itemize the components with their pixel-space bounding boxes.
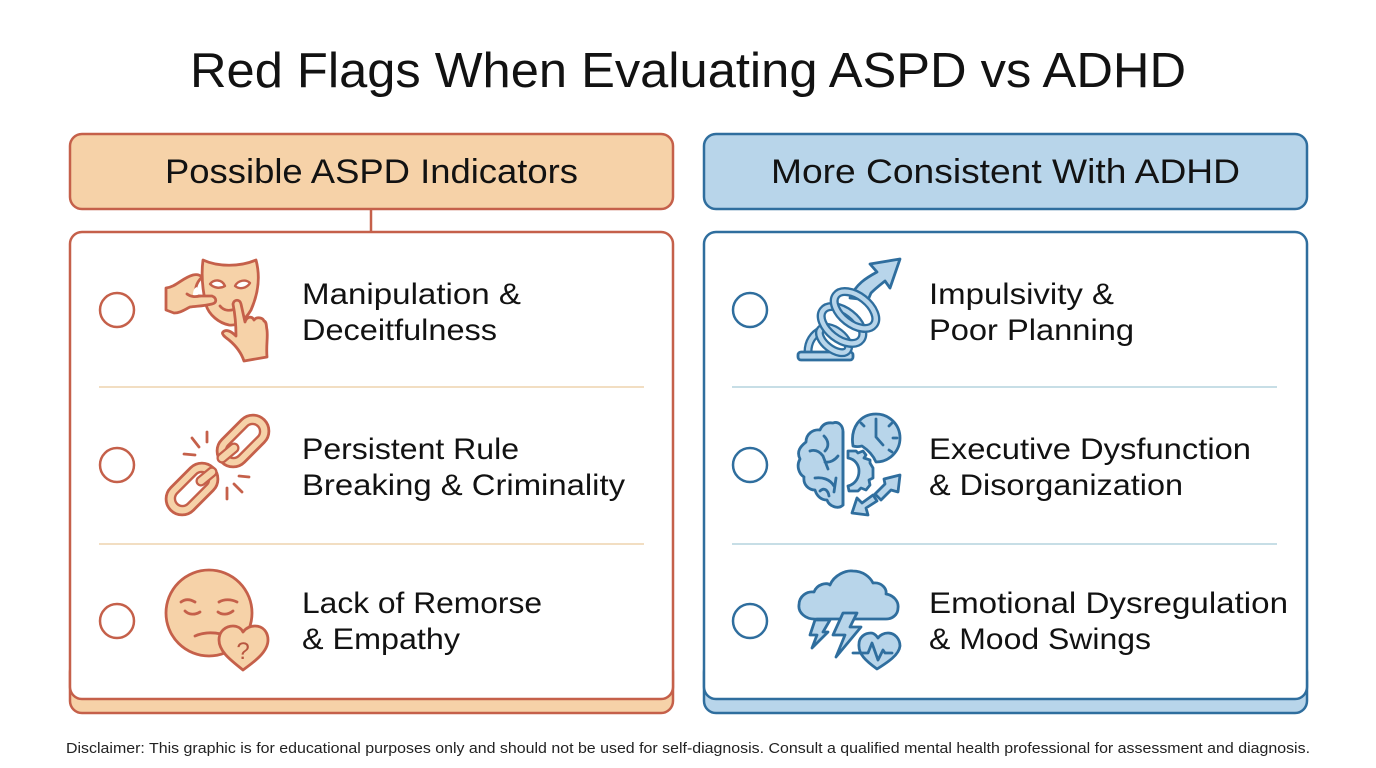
panel header: ASPD <box>70 134 673 209</box>
label: Manipulation & <box>302 278 521 311</box>
label <box>929 278 1134 347</box>
panel tray: ASPD <box>70 660 673 713</box>
label: Emotional Dysregulation <box>929 587 1288 620</box>
icon: broken chain <box>159 408 276 522</box>
panel tray: ADHD <box>704 660 1307 713</box>
label: Breaking & Criminality <box>302 469 625 502</box>
label: Lack of Remorse <box>302 587 542 620</box>
question mark: ? <box>236 638 250 665</box>
label: Executive Dysfunction <box>929 433 1251 466</box>
label <box>302 433 625 502</box>
label: Poor Planning <box>929 314 1134 347</box>
connector <box>370 209 372 232</box>
panel: ASPD indicators <box>70 134 673 713</box>
checkbox circle <box>733 604 767 638</box>
icon: brain, clock, gear, arrows <box>798 414 900 515</box>
label <box>302 278 521 347</box>
item: executive dysfunction <box>733 414 1251 515</box>
label <box>929 433 1251 502</box>
checkbox circle <box>733 293 767 327</box>
item: rule breaking <box>100 408 625 522</box>
label <box>302 587 542 656</box>
panel header: ASPD: Possible ASPD Indicators <box>165 153 578 191</box>
checkbox circle <box>100 448 134 482</box>
panel body: ASPD <box>70 232 673 699</box>
panel header: ADHD: More Consistent With ADHD <box>771 153 1240 191</box>
checkbox circle <box>100 604 134 638</box>
panel header: ADHD <box>704 134 1307 209</box>
label: & Disorganization <box>929 469 1183 502</box>
item: emotional dysregulation <box>733 571 1288 669</box>
icon: sad face with heart <box>166 570 268 670</box>
label: Deceitfulness <box>302 314 497 347</box>
panel: ADHD indicators <box>704 134 1307 713</box>
label: Persistent Rule <box>302 433 519 466</box>
item: impulsivity <box>733 259 1134 360</box>
label: & Empathy <box>302 623 460 656</box>
item: lack of remorse <box>100 570 542 670</box>
label: Impulsivity & <box>929 278 1114 311</box>
panel body: ADHD <box>704 232 1307 699</box>
title: Red Flags When Evaluating ASPD vs ADHD <box>190 44 1186 98</box>
icon: storm cloud and heart <box>799 571 900 669</box>
label: & Mood Swings <box>929 623 1151 656</box>
checkbox circle <box>733 448 767 482</box>
label <box>929 587 1288 656</box>
checkbox circle <box>100 293 134 327</box>
disclaimer: Disclaimer: This graphic is for educational purposes only and should not be used for self-diagnosis. Consult a qualified mental health professional for assessment and diagnosis. <box>66 741 1310 757</box>
icon: spring and arrow <box>798 259 900 360</box>
icon: mask and hands <box>166 260 267 361</box>
item: manipulation <box>100 260 521 361</box>
